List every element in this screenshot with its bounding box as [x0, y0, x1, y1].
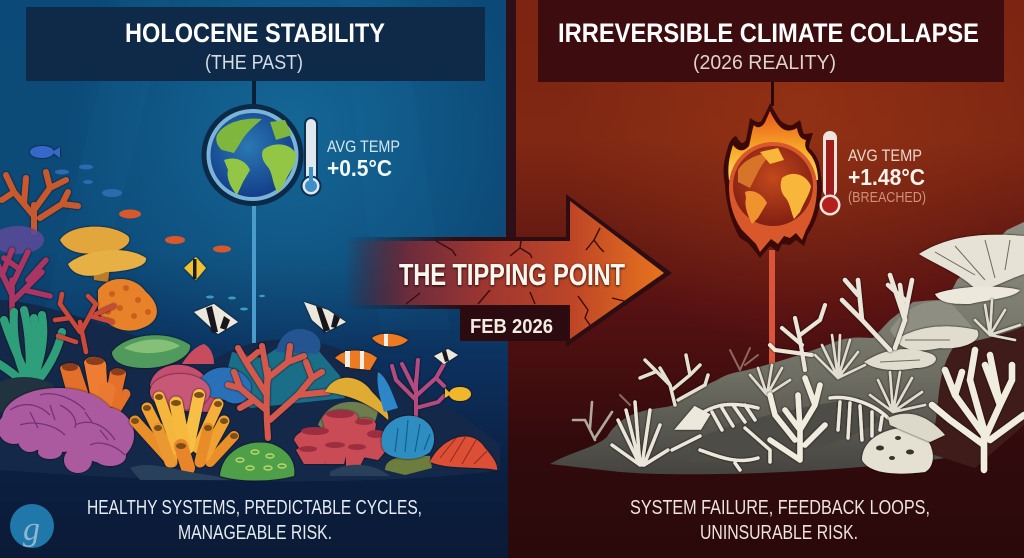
- rock: shadow band: [690, 398, 880, 462]
- arrow: the tipping point: [345, 194, 672, 347]
- reef: healthy coral: [0, 172, 500, 481]
- coral: teal-green fronds: [0, 310, 62, 385]
- coral: center branching: [770, 378, 825, 460]
- bone: fragments: [672, 428, 770, 470]
- melting sphere: [729, 142, 817, 252]
- rock: upper mound: [890, 301, 975, 345]
- fish school: [30, 146, 471, 401]
- arrow fill: [345, 201, 664, 339]
- label: avg temp now: (BREACHED): [848, 189, 926, 206]
- fish: blue tang: [30, 146, 60, 158]
- arrow outline: [345, 194, 672, 347]
- coral: crimson fan: [0, 250, 50, 315]
- coral: orange tubes: [60, 357, 130, 420]
- header: irreversible climate collapse: (2026 REALITY): [693, 52, 836, 74]
- fish: yellow tang: [445, 387, 471, 401]
- coral pattern: green rings: [236, 450, 286, 470]
- fish: black white angels: [194, 302, 458, 364]
- coral: tall branching: [842, 275, 912, 350]
- coral: orange branching top: [2, 172, 78, 232]
- caption: healthy systems: MANAGEABLE RISK.: [178, 522, 332, 544]
- coral: thin branching lower left: [573, 402, 612, 440]
- icon: burning globe: [724, 103, 822, 258]
- bone: fish skeleton 1: [678, 404, 758, 430]
- coral: yellow tube openings: [131, 392, 238, 449]
- coral: grass tuft left: [612, 402, 668, 465]
- flames: [724, 103, 822, 258]
- coral: red branching center: [228, 346, 328, 438]
- coral: porous boulder: [862, 427, 933, 474]
- arrow label: feb 2026: [460, 306, 568, 341]
- caption: system failure: UNINSURABLE RISK.: [700, 522, 858, 544]
- panel: Holocene past: [0, 0, 508, 558]
- header: holocene stability: (THE PAST): [205, 52, 303, 74]
- coral: purple backdrop: [0, 226, 44, 254]
- seabed rocks: [130, 465, 390, 480]
- caption: healthy systems: [87, 497, 422, 544]
- coral: green brain: [220, 442, 294, 480]
- arrow cracks: [406, 228, 628, 328]
- molten continents: [738, 148, 811, 224]
- rock: mounds: [550, 222, 1024, 474]
- rock: dark shading: [925, 326, 1024, 468]
- coral: orange bumpy: [98, 279, 157, 331]
- header: holocene stability: [26, 7, 485, 81]
- coral: pink bumpy mid: [150, 374, 210, 410]
- coral pattern: fan ribs: [440, 436, 488, 464]
- label: avg temp past: [327, 137, 400, 181]
- label: avg temp past: AVG TEMP: [327, 137, 400, 156]
- label: avg temp now: +1.48°C: [848, 164, 925, 190]
- coral pattern: orange bumps: [105, 285, 151, 319]
- coral: yellow tubes: [135, 395, 234, 468]
- coral: yellow fan: [325, 378, 388, 420]
- logo badge: g: [23, 511, 40, 548]
- bone: fish skeleton 2: [830, 397, 888, 440]
- fish: red small: [119, 210, 231, 252]
- label: avg temp now: AVG TEMP: [848, 146, 922, 165]
- reef backdrop: [0, 300, 500, 481]
- coral: small pink fan: [182, 344, 214, 364]
- coral: stipple on tables: [880, 240, 1010, 362]
- coral: spiky tufts: [750, 300, 1020, 412]
- fish: clownfish: [335, 334, 408, 370]
- fish: tiny teal: [206, 295, 265, 310]
- center divider: [506, 0, 516, 245]
- coral: pink bumpy: [150, 365, 217, 412]
- caption: system failure: SYSTEM FAILURE, FEEDBACK LOOPS,: [630, 497, 930, 519]
- fish: yellow angel: [184, 257, 206, 280]
- icon: healthy globe: [202, 104, 304, 206]
- coral: large right branching: [932, 350, 1024, 470]
- header: irreversible climate collapse: [538, 0, 1004, 82]
- coral: olive base: [385, 456, 432, 475]
- header: holocene stability: HOLOCENE STABILITY: [125, 18, 385, 48]
- globe continents: [216, 119, 296, 195]
- coral: faded branching: [620, 348, 758, 405]
- panel: climate collapse: [508, 0, 1024, 558]
- caption: healthy systems: HEALTHY SYSTEMS, PREDICTABLE CYCLES,: [87, 497, 422, 519]
- coral: teal background: [222, 345, 345, 408]
- coral: blue bumpy: [200, 367, 251, 403]
- header: irreversible climate collapse: IRREVERSIBLE CLIMATE COLLAPSE: [558, 18, 979, 48]
- icon: healthy thermometer: [300, 117, 322, 196]
- coral pattern: blue ribs: [395, 420, 430, 452]
- coral: green table: [112, 335, 190, 368]
- coral: blue top fan: [276, 329, 320, 354]
- connector: right lines: [769, 82, 775, 372]
- icon: hot thermometer: [820, 131, 840, 216]
- arrow label: feb 2026: FEB 2026: [470, 316, 553, 338]
- coral: blue fan: [382, 416, 434, 459]
- coral pattern: pores: [876, 436, 914, 460]
- coral: fan table: [864, 235, 1024, 370]
- coral: purple brain: [0, 388, 134, 473]
- coral: mid branching: [770, 305, 825, 370]
- coral: skull rock: [888, 414, 945, 442]
- coral: left small branching: [640, 355, 708, 405]
- coral: magenta branching: [392, 360, 444, 418]
- label: avg temp past: +0.5°C: [327, 155, 392, 181]
- coral: blue wedge: [377, 372, 398, 412]
- label: avg temp now: [848, 146, 926, 206]
- arrow heading: THE TIPPING POINT: [399, 257, 625, 292]
- coral: dark rock: [0, 377, 60, 417]
- coral: yellow table: [60, 227, 146, 282]
- coral pattern: red tube openings: [299, 410, 385, 452]
- connector: left lines: [252, 81, 256, 343]
- reef: bleached coral: [550, 222, 1024, 474]
- coral: red-orange fan: [430, 436, 497, 470]
- caption: system failure: [630, 497, 930, 544]
- coral pattern: brain ridges: [10, 394, 125, 455]
- coral: red branching left: [55, 294, 114, 352]
- coral: red tubes: [294, 410, 390, 466]
- coral: olive rock: [318, 402, 378, 434]
- fish: small blues: [55, 164, 122, 197]
- logo badge: [10, 504, 54, 548]
